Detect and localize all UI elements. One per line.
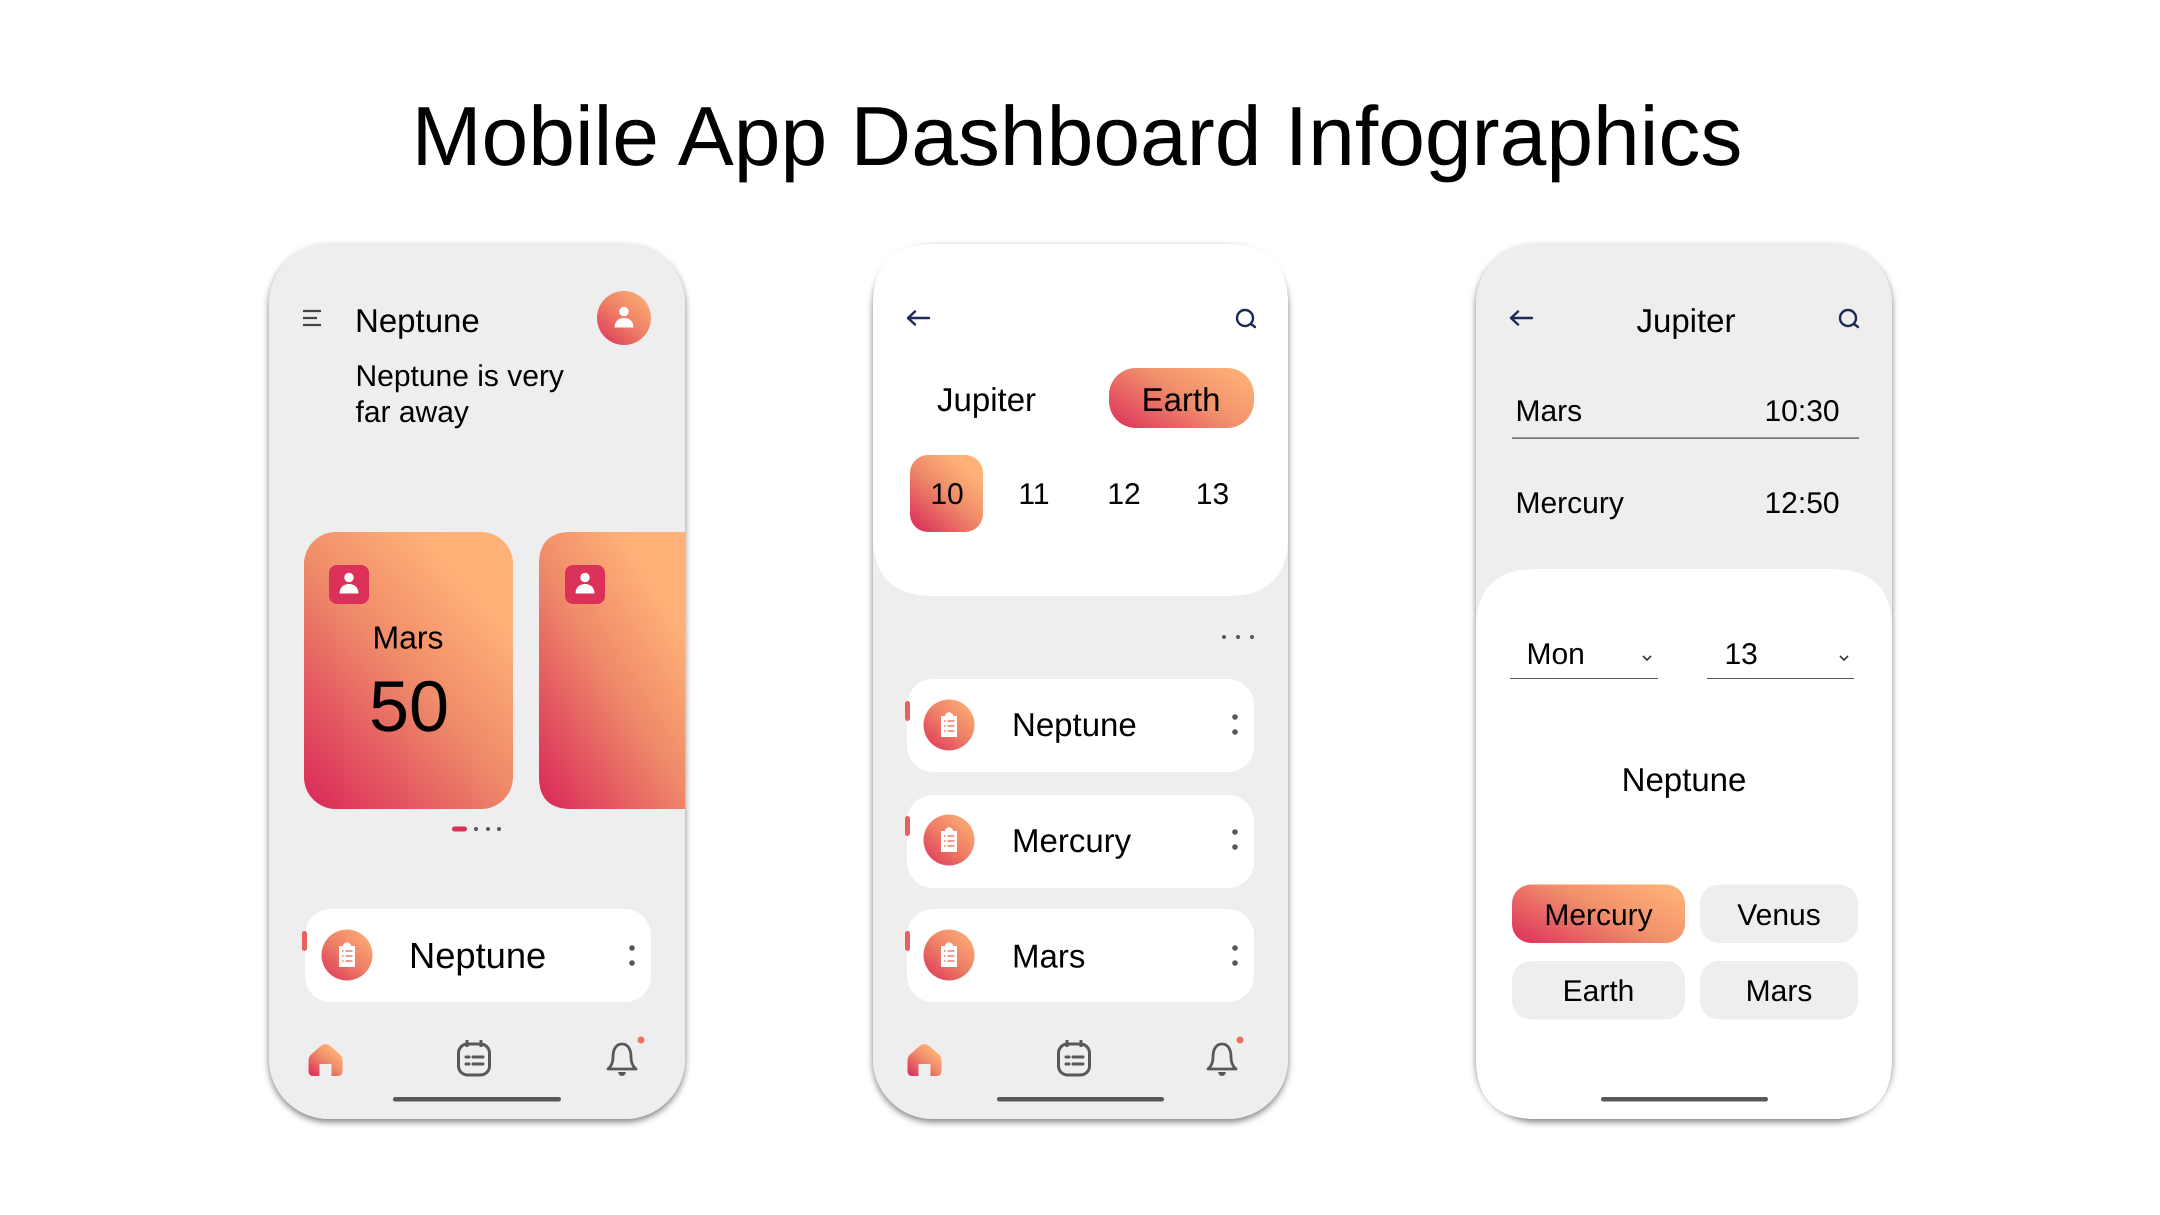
list row: Mars: Mars bbox=[1012, 938, 1085, 974]
panel: phone 1 home screen bbox=[269, 244, 685, 1119]
icon: search bbox=[1237, 310, 1255, 327]
list row: Neptune bbox=[905, 679, 1254, 772]
dropdown: day bbox=[1510, 638, 1658, 679]
list row: Neptune bbox=[302, 909, 651, 1002]
home indicator bbox=[393, 1097, 561, 1102]
home indicator bbox=[1601, 1097, 1768, 1102]
label: Neptune: Neptune bbox=[1622, 761, 1746, 798]
button: Mars bbox=[1700, 961, 1858, 1020]
icon: bell bbox=[608, 1044, 636, 1076]
date selector: 10 bbox=[930, 478, 964, 511]
date selector: 13 bbox=[1196, 478, 1229, 511]
phone 2 body bbox=[873, 244, 1288, 1119]
icon: search bbox=[1840, 310, 1858, 327]
list row: Mercury: Mercury bbox=[1012, 822, 1132, 859]
phone 3 heading: Jupiter bbox=[1636, 302, 1736, 339]
icon: bell bbox=[1208, 1044, 1236, 1076]
dropdown: date: 13 bbox=[1724, 638, 1758, 671]
button: Mars: Mars bbox=[1746, 975, 1812, 1008]
notification dot bbox=[1236, 1036, 1244, 1044]
date selector: 12 bbox=[1107, 478, 1141, 511]
phone 1 description: Neptune is very bbox=[356, 360, 564, 393]
notification dot bbox=[638, 1036, 644, 1044]
list row: Neptune: Neptune bbox=[1012, 706, 1137, 743]
list row: Neptune: Neptune bbox=[409, 935, 546, 976]
date selector: 11 bbox=[1018, 478, 1050, 511]
panel: phone 3 booking screen bbox=[1476, 244, 1892, 1119]
bottom white panel bbox=[1476, 569, 1892, 1119]
schedule row: Mercury: 12:50 bbox=[1764, 487, 1840, 520]
dropdown: day: Mon bbox=[1526, 638, 1585, 671]
tab: Earth active: Earth bbox=[1142, 381, 1220, 418]
icon: home bbox=[908, 1044, 942, 1076]
icon: calendar bbox=[458, 1040, 490, 1075]
more dots bbox=[1222, 635, 1254, 639]
button: Earth bbox=[1512, 961, 1685, 1020]
card: next partial bbox=[539, 532, 685, 809]
card: Mars bbox=[304, 532, 513, 809]
tab: Jupiter: Jupiter bbox=[937, 381, 1036, 418]
icon: home bbox=[308, 1044, 342, 1076]
title: Mobile App Dashboard Infographics bbox=[412, 89, 1742, 183]
phone 1 heading: Neptune bbox=[355, 302, 480, 339]
top white panel bbox=[873, 244, 1288, 596]
phone 3 body bbox=[1476, 244, 1892, 1119]
icon: calendar bbox=[1058, 1040, 1090, 1075]
dropdown: date bbox=[1707, 638, 1854, 679]
icon: avatar bbox=[597, 291, 651, 345]
panel: phone 2 list screen bbox=[873, 244, 1288, 1119]
button: Mercury active: Mercury bbox=[1544, 899, 1653, 932]
schedule row: Mars: Mars bbox=[1516, 395, 1582, 428]
schedule row: Mars bbox=[1512, 395, 1859, 439]
button: Earth: Earth bbox=[1563, 975, 1634, 1008]
button: Venus: Venus bbox=[1737, 899, 1821, 932]
card: Mars: Mars bbox=[372, 620, 444, 656]
list row: Mercury bbox=[905, 795, 1254, 888]
home indicator bbox=[997, 1097, 1164, 1102]
tab: Earth active bbox=[1109, 368, 1254, 428]
carousel pager bbox=[452, 826, 501, 832]
schedule row: Mercury bbox=[1516, 487, 1840, 520]
button: Mercury active bbox=[1512, 884, 1685, 943]
schedule row: Mars: 10:30 bbox=[1764, 395, 1840, 428]
schedule row: Mercury: Mercury bbox=[1516, 487, 1624, 520]
phone 1 body bbox=[269, 244, 685, 1119]
list row: Mars bbox=[905, 909, 1254, 1002]
card: Mars: 50 bbox=[369, 667, 449, 747]
phone 1 description: far away bbox=[356, 396, 469, 429]
icon: menu bbox=[303, 311, 321, 325]
icon: back arrow bbox=[908, 312, 929, 324]
icon: back arrow bbox=[1511, 312, 1532, 324]
button: Venus bbox=[1700, 884, 1858, 943]
date selector bbox=[910, 455, 1229, 532]
